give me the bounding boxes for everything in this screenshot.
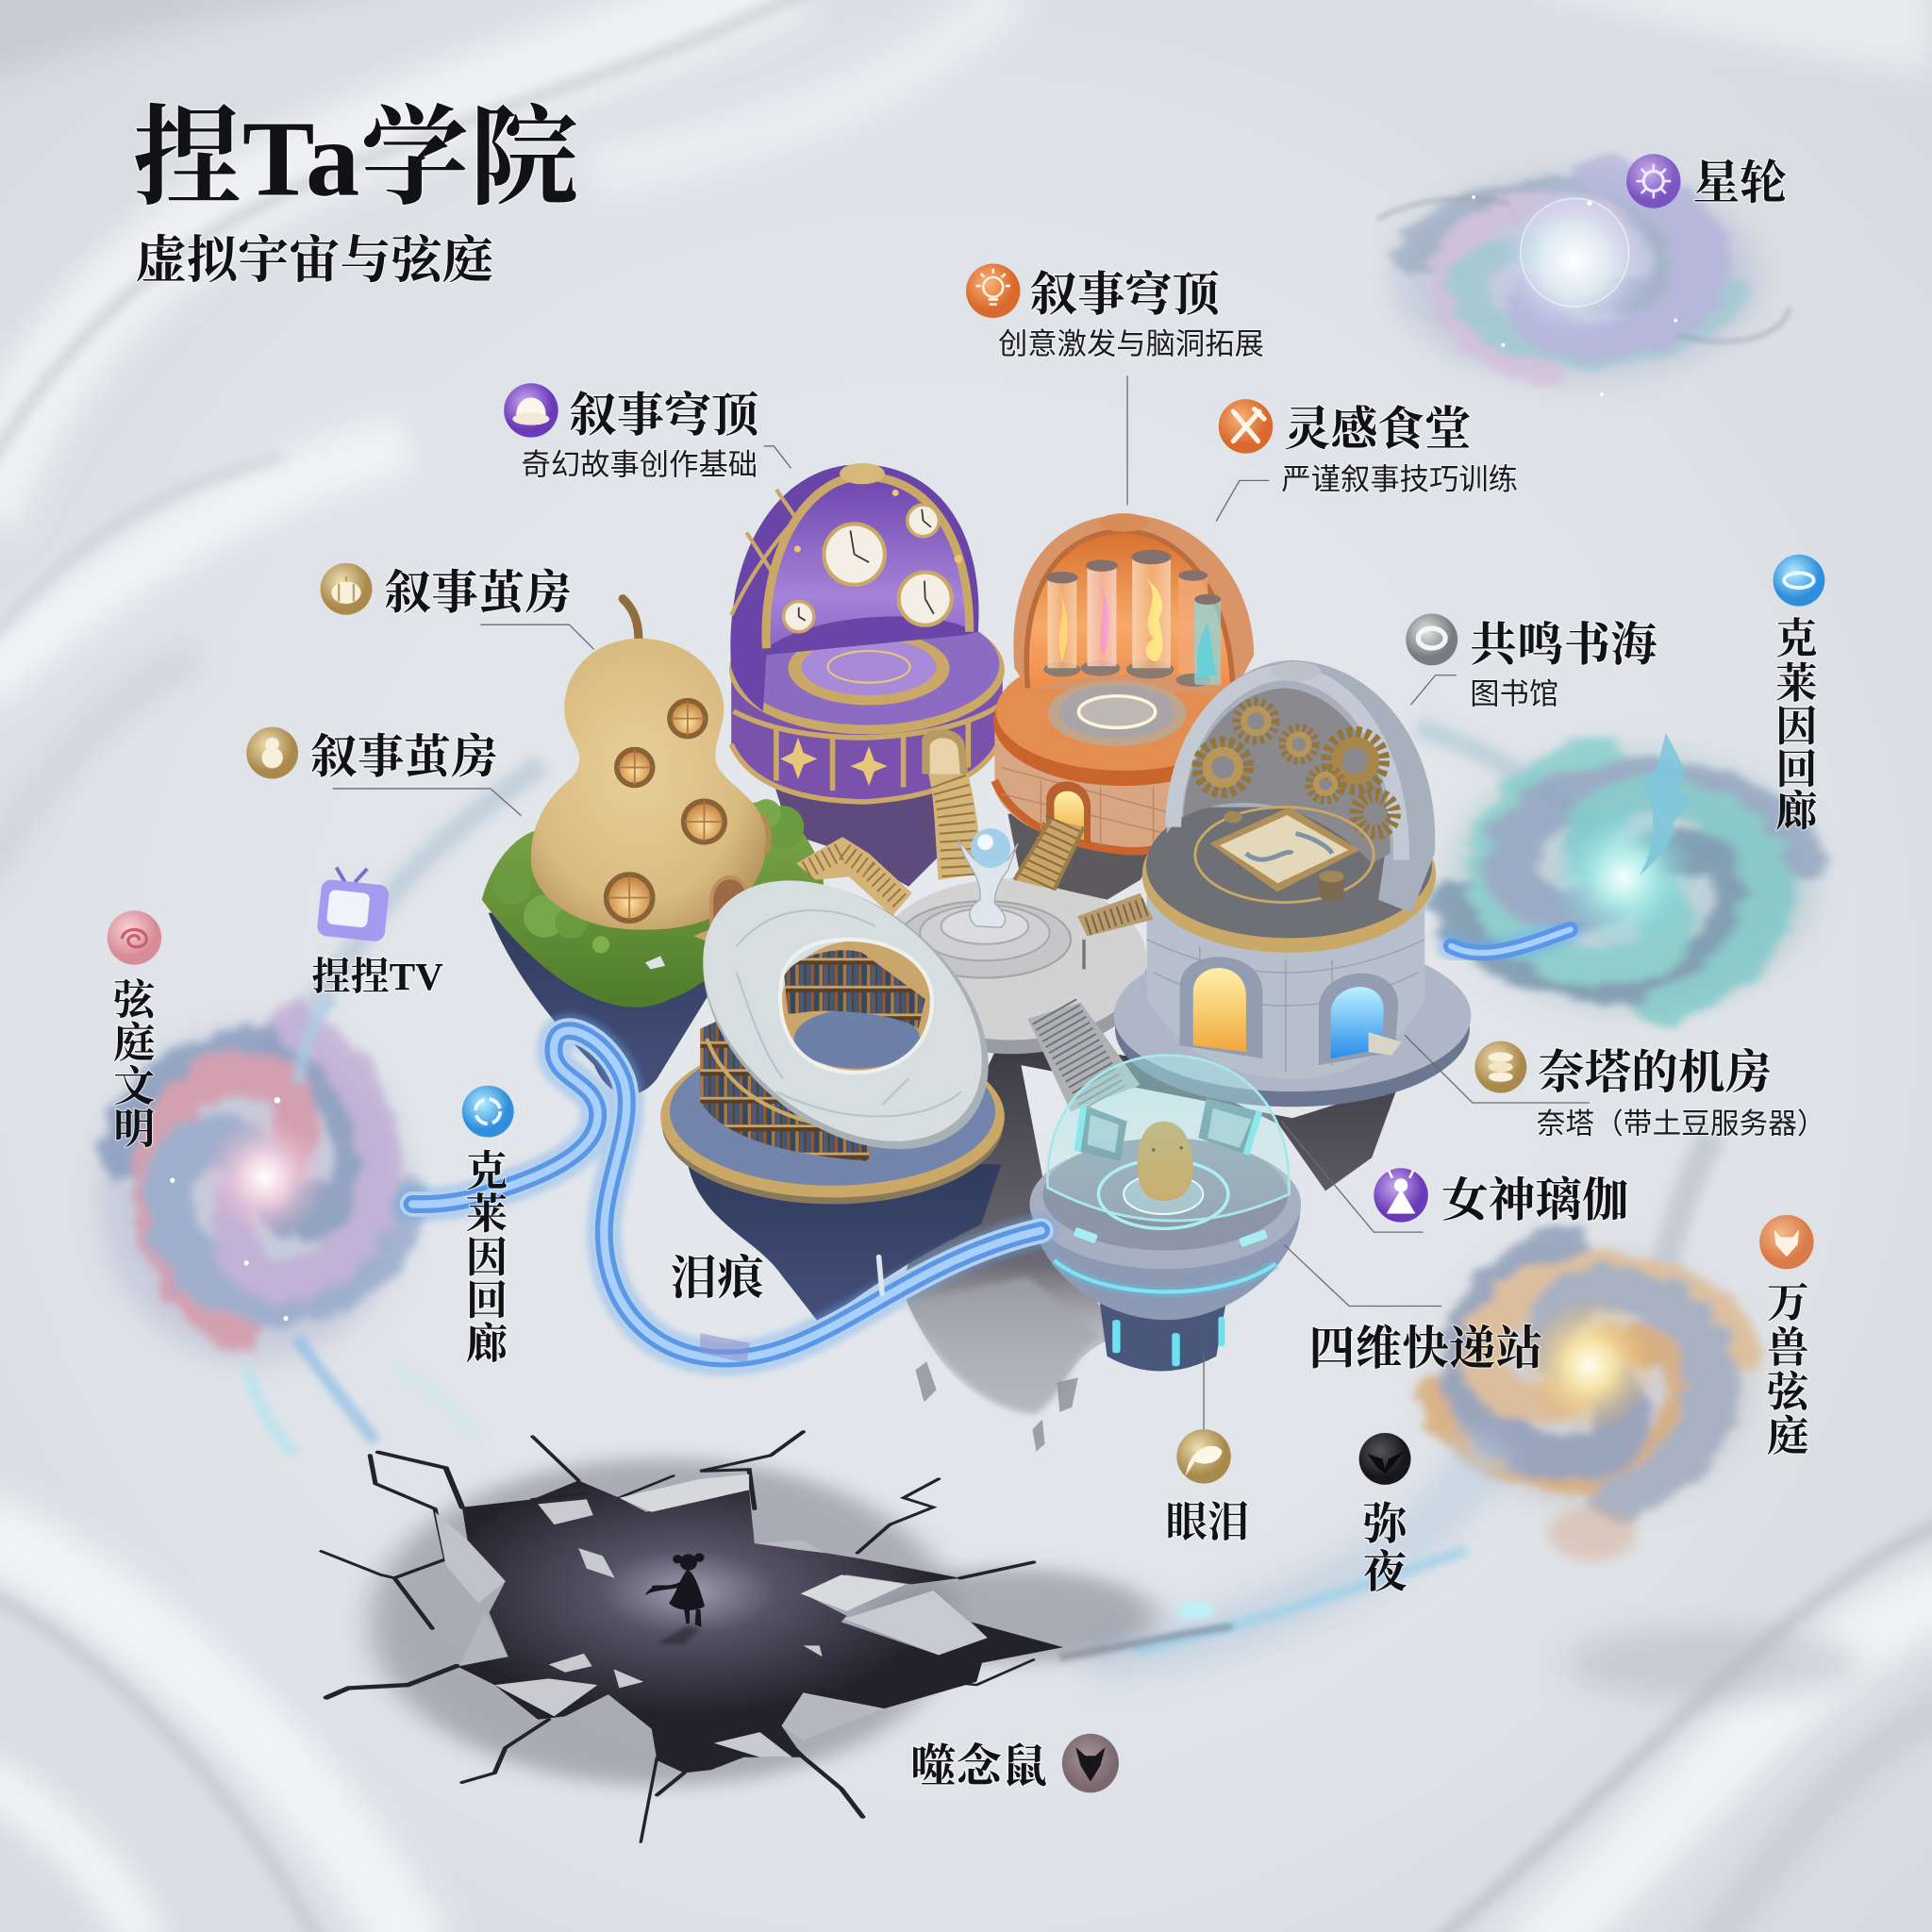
icon: goddess: [1374, 1168, 1428, 1223]
label: 克莱因回廊 left: 克: [466, 1147, 508, 1194]
label: 叙事穹顶 创意: [966, 264, 1264, 360]
silhouette: girl: [645, 1553, 705, 1627]
building: purple observatory 叙事穹顶: [729, 463, 1005, 887]
label: 弥夜: 夜: [1363, 1548, 1407, 1597]
label: 捏捏TV: 捏捏TV: [311, 955, 443, 998]
gourd windows: [607, 701, 724, 921]
label: 灵感食堂: [1219, 399, 1518, 496]
label: 叙事茧房 2: 叙事茧房: [310, 731, 498, 783]
illustration: void crack with silhouette: [322, 1432, 1156, 1842]
stairs: plaza to canteen: [1014, 819, 1084, 890]
leader lines: [333, 375, 1590, 1429]
platform: central plaza: [875, 878, 1147, 1054]
label: 克莱因回廊 left: 莱: [466, 1191, 508, 1238]
label: 弥夜: [1359, 1433, 1411, 1597]
label: 克莱因回廊 right: [1774, 555, 1824, 835]
icon: fork and knife: [1219, 399, 1273, 454]
building: grey library 共鸣书海: [1142, 660, 1436, 1080]
label: 克莱因回廊 right: 克: [1775, 615, 1818, 662]
label: 弦庭文明: 明: [113, 1106, 156, 1153]
icon: TV: [316, 868, 390, 942]
icon: server stack: [1474, 1041, 1526, 1093]
debris stones: [915, 1361, 1078, 1452]
label: 眼泪: [1166, 1429, 1249, 1546]
island: green gourd island: [482, 799, 824, 1094]
galaxy: 万兽弦庭: [1436, 1134, 1756, 1561]
label: 弥夜: 弥: [1363, 1500, 1410, 1549]
label: 弦庭文明: 文: [113, 1062, 156, 1109]
stairs: plaza to pod: [1027, 1002, 1141, 1111]
subtitle: 虚拟宇宙与弦庭: [136, 232, 493, 289]
label: 克莱因回廊 left: [462, 1086, 514, 1367]
label: 万兽弦庭: 万: [1767, 1279, 1808, 1326]
label: 叙事穹顶 奇幻: 奇幻故事创作基础: [521, 448, 758, 481]
label: 女神璃伽: [1374, 1168, 1629, 1226]
label: 灵感食堂: 严谨叙事技巧训练: [1281, 463, 1518, 496]
label: 克莱因回廊 left: 因: [466, 1234, 508, 1281]
clocks: [784, 505, 952, 632]
label: 奈塔的机房: 奈塔（带土豆服务器）: [1537, 1108, 1826, 1141]
label: 叙事穹顶 奇幻: [504, 383, 761, 481]
building: Möbius ring library 回廊: [652, 827, 1041, 1204]
label: 共鸣书海: [1406, 613, 1657, 710]
label: 万兽弦庭: 弦: [1767, 1368, 1811, 1415]
icon: pink spiral: [108, 910, 161, 965]
galaxy: 星轮: [1377, 173, 1789, 396]
label: 克莱因回廊 left: 回: [466, 1277, 508, 1324]
crack fissures: [322, 1432, 1033, 1842]
label: 四维快递站: 四维快递站: [1308, 1323, 1542, 1374]
gears: [1200, 704, 1393, 832]
label: 克莱因回廊 right: 莱: [1775, 659, 1818, 707]
canteen door: [1046, 781, 1091, 843]
dome shell: [1167, 660, 1435, 913]
energy trail from crack to 万兽弦庭: [1059, 1441, 1860, 1700]
icon: beast head: [1759, 1215, 1814, 1269]
label: 叙事茧房 1: 叙事茧房: [385, 567, 572, 619]
rock: blue under library: [687, 1161, 1001, 1324]
label: 叙事穹顶 奇幻: 叙事穹顶: [569, 389, 761, 441]
crack hole: [457, 1480, 1063, 1773]
label: 克莱因回廊 right: 廊: [1775, 788, 1818, 835]
icon: dark beast: [1062, 1734, 1119, 1792]
icon: grey spiral: [1406, 613, 1457, 665]
icon: gourd: [246, 727, 298, 778]
icon: dark wings: [1359, 1433, 1411, 1485]
statue: crystal orb: [958, 828, 1018, 927]
label: 眼泪: 眼泪: [1166, 1499, 1249, 1546]
label: 克莱因回廊 right: 因: [1775, 703, 1818, 750]
rock: central underside: [902, 1039, 1398, 1414]
title: 捏Ta学院: [133, 98, 579, 218]
label: 噬念鼠: 噬念鼠: [910, 1741, 1047, 1792]
stairs: purple tower: [922, 729, 981, 880]
central floating academy: [412, 463, 1571, 1414]
icon: cocoon pumpkin: [321, 563, 372, 615]
icon: blue swirl: [1774, 555, 1824, 607]
label: 奈塔的机房: [1474, 1041, 1826, 1141]
label: 万兽弦庭: 庭: [1767, 1412, 1808, 1459]
label: 共鸣书海: 共鸣书海: [1470, 619, 1657, 671]
label: 共鸣书海: 图书馆: [1470, 677, 1558, 710]
label: 泪痕: 泪痕: [671, 1252, 764, 1304]
icon: star wheel: [1626, 154, 1681, 208]
building: glass pod 四维快递站: [1030, 1056, 1301, 1372]
icon: fish tear: [1176, 1429, 1231, 1484]
tubes: [1043, 550, 1221, 687]
label: 弦庭文明: 庭: [113, 1020, 156, 1067]
label: 叙事茧房 2: [246, 727, 498, 783]
label: 叙事穹顶 创意: 叙事穹顶: [1030, 268, 1223, 321]
label: 星轮: [1626, 154, 1787, 208]
building: gourd 叙事茧房: [531, 599, 770, 942]
galaxy: 弦庭文明: [98, 764, 542, 1454]
label: 万兽弦庭: 兽: [1767, 1324, 1808, 1371]
label: 叙事茧房 1: [321, 563, 572, 619]
icon: light bulb: [966, 264, 1020, 318]
label: 万兽弦庭: [1759, 1215, 1814, 1459]
label: 克莱因回廊 right: 回: [1775, 746, 1818, 793]
label: 捏捏TV: [311, 868, 443, 998]
icon: blue ring: [462, 1086, 514, 1138]
label: 弦庭文明: [108, 910, 161, 1153]
label: 克莱因回廊 left: 廊: [466, 1320, 508, 1367]
stairs: plaza wooden: [1077, 893, 1154, 969]
label: 弦庭文明: 弦: [113, 976, 158, 1024]
stairs: wooden zigzag: [796, 837, 912, 916]
broken plates: [435, 1474, 988, 1757]
label: 星轮: 星轮: [1693, 157, 1787, 208]
path: glowing blue corridor: [412, 929, 1571, 1363]
label: 叙事穹顶 创意: 创意激发与脑洞拓展: [998, 327, 1264, 360]
label: 噬念鼠: [910, 1734, 1119, 1792]
label: 灵感食堂: 灵感食堂: [1284, 404, 1471, 456]
icon: white dome: [504, 383, 558, 438]
dome interior: [766, 476, 968, 648]
galaxy: 克莱因回廊 right: [1417, 727, 1818, 1010]
dome shell: [730, 464, 979, 711]
label: 女神璃伽: 女神璃伽: [1441, 1174, 1629, 1226]
platform: grey tower base: [1114, 940, 1471, 1107]
label: 奈塔的机房: 奈塔的机房: [1538, 1046, 1772, 1098]
building: orange canteen 灵感食堂: [993, 513, 1259, 900]
map table: [1209, 808, 1360, 891]
